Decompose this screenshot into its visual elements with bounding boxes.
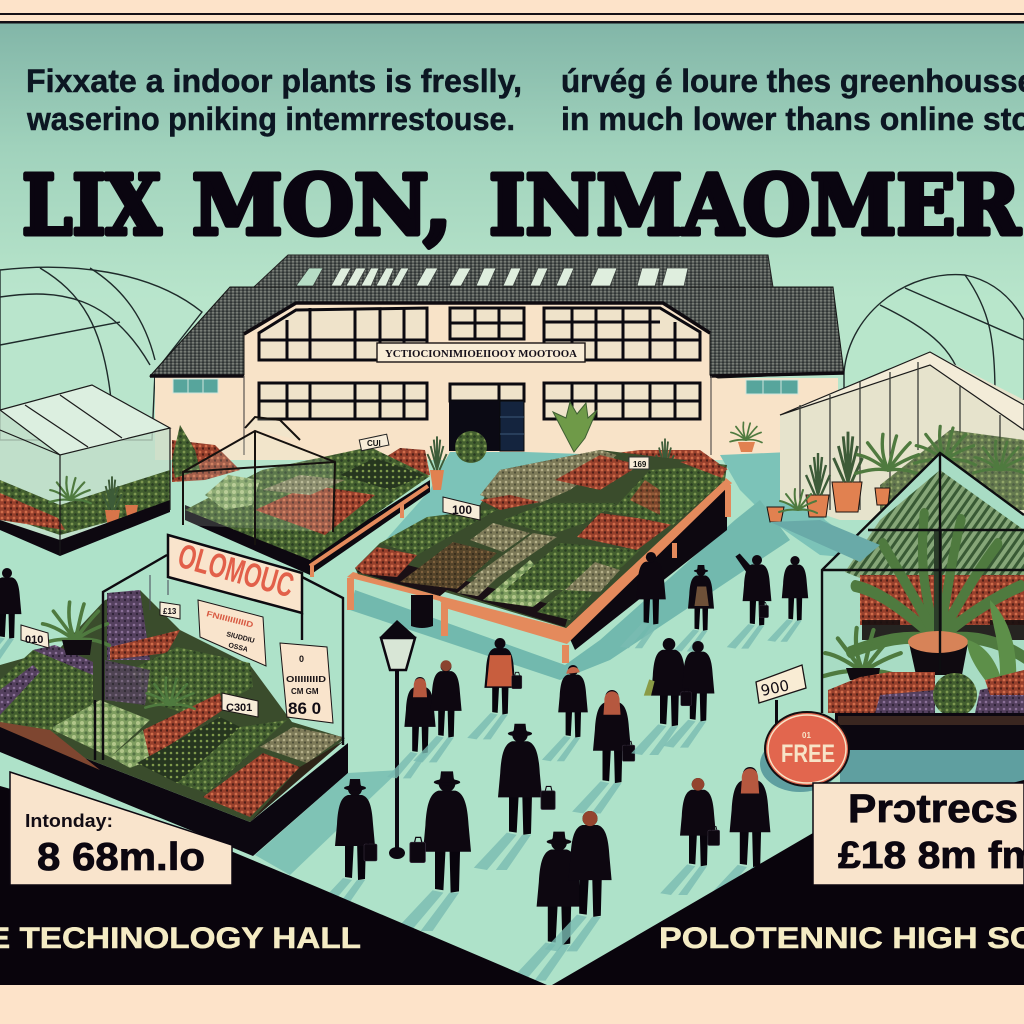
glass frame	[183, 417, 335, 545]
man with hat and bag	[474, 724, 555, 870]
spiky plant	[656, 438, 674, 470]
dark table body	[565, 480, 727, 650]
olomouc market stall	[0, 535, 348, 856]
table tops	[347, 478, 732, 644]
tag on bed	[629, 457, 649, 469]
stall black base	[0, 725, 348, 856]
black banner right	[552, 780, 1024, 985]
man with hat front	[397, 771, 471, 931]
woman by table corner	[542, 665, 588, 761]
banner label right: POLOTENNIC HIGH SCI	[659, 922, 1024, 955]
poster with price: 86 0	[288, 699, 321, 718]
info box right: Prɔtrecs	[848, 787, 1018, 831]
woman in black	[413, 660, 462, 762]
soil trays	[860, 575, 1024, 625]
poster: SIUDDIU	[226, 631, 255, 645]
olomouc sign: OLOMOUC	[174, 537, 298, 605]
wall block	[155, 304, 838, 460]
center plant tables	[347, 450, 790, 680]
woman with bag	[572, 690, 635, 814]
left leaf plant	[823, 628, 903, 678]
woman right red hair	[707, 767, 770, 900]
hat person bottom	[512, 832, 581, 981]
right leaf plant	[967, 600, 1016, 698]
title	[22, 158, 1021, 254]
poster: OSSA	[228, 642, 248, 654]
price tag 010: 010	[25, 634, 43, 646]
teal floor shadows near stall	[255, 770, 400, 875]
black banner left	[0, 786, 547, 985]
price sign 900	[756, 665, 806, 726]
second of couple	[664, 641, 714, 748]
entrance door	[449, 401, 524, 451]
lower roof	[150, 287, 844, 378]
top double rule	[0, 13, 1024, 24]
skylights	[296, 268, 688, 286]
price tag c301: C301	[226, 702, 252, 714]
price sign 900: 900	[759, 676, 791, 700]
plant base	[355, 450, 727, 628]
frame	[95, 555, 343, 760]
person walking	[767, 556, 808, 642]
person with hat tan coat	[674, 565, 714, 652]
ground	[0, 440, 1024, 985]
info box left	[10, 772, 232, 885]
street lamp	[380, 620, 416, 859]
potted plant by wall	[738, 442, 755, 452]
poster with price: OIIIIIIIID	[286, 675, 326, 684]
title: MON,	[192, 158, 452, 254]
intro text right	[561, 63, 1024, 137]
intro text right: in much lower thans online sto	[561, 101, 1024, 137]
title: LIX	[22, 158, 161, 254]
free badge	[760, 712, 849, 792]
bush by door	[455, 431, 487, 463]
woman right with bag	[660, 778, 720, 895]
building name sign	[377, 343, 585, 362]
middle-left bed with glass frame: CUI	[367, 439, 381, 448]
back plants	[0, 590, 345, 822]
info box left: Intonday:	[25, 811, 113, 831]
free badge: FREE	[781, 740, 835, 768]
pots	[357, 555, 570, 627]
right front greenhouse	[770, 453, 1024, 783]
tags	[359, 434, 389, 451]
intro text left: Fixxate a indoor plants is freslly,	[26, 63, 522, 99]
trash bin	[411, 595, 433, 628]
olomouc sign	[168, 535, 302, 613]
building name sign: YCTIOCIONIMIOEIIOOY MOOTOOA	[385, 348, 577, 360]
lower windows	[259, 383, 700, 419]
middle-left bed with glass frame	[183, 417, 430, 577]
left glass greenhouse	[0, 385, 170, 556]
palm	[851, 514, 1024, 658]
info box right	[813, 783, 1024, 885]
flower rows	[828, 672, 935, 713]
poster: FNIIIIIIIIIID	[206, 609, 255, 630]
conifer shrub	[553, 402, 597, 452]
info box right: £18 8m fm	[838, 835, 1024, 877]
upper roof	[240, 255, 775, 300]
person far left	[0, 568, 21, 662]
person in orange coat	[467, 638, 522, 739]
info box left: 8 68m.lo	[37, 836, 205, 879]
poster with price: CM GM	[291, 687, 319, 696]
poster with price: 0	[299, 654, 304, 664]
poster	[198, 600, 266, 666]
person with arm raised	[727, 554, 771, 649]
teal floor patches	[350, 452, 880, 580]
back planting along building	[172, 402, 762, 490]
poster with price	[280, 643, 333, 723]
table shadow	[350, 500, 790, 680]
teal side windows	[173, 379, 798, 394]
teal floor strip	[840, 750, 1024, 783]
right dome greenhouse	[844, 275, 1024, 400]
intro text left: waserino pniking intemrrestouse.	[26, 101, 515, 137]
small tag: £13	[163, 607, 177, 616]
table legs	[347, 485, 731, 663]
red haired woman	[387, 677, 436, 778]
frond mass	[845, 470, 1024, 600]
orange pot with grass	[430, 470, 444, 490]
left dome greenhouse	[0, 267, 202, 440]
price tag 100: 100	[452, 503, 472, 517]
potted plants	[767, 426, 1024, 522]
person by table	[620, 552, 666, 648]
shoppers	[0, 552, 808, 981]
school building	[150, 255, 844, 460]
free badge: 01	[802, 731, 811, 740]
right back greenhouse	[767, 352, 1024, 522]
intro text left	[26, 63, 522, 137]
price tag c301	[222, 693, 258, 717]
price tag 010	[21, 625, 49, 648]
small tag	[160, 602, 180, 619]
couple right	[631, 638, 687, 755]
black base	[835, 713, 1024, 750]
red curly person bottom	[545, 811, 612, 951]
plant beds	[355, 547, 417, 577]
big pot	[909, 635, 968, 675]
center plant tables: 169	[633, 460, 647, 469]
price tag 100	[443, 497, 480, 520]
upper windows	[259, 308, 700, 360]
frame	[822, 453, 1024, 713]
person with hat left	[313, 779, 377, 912]
plant base	[0, 590, 345, 822]
